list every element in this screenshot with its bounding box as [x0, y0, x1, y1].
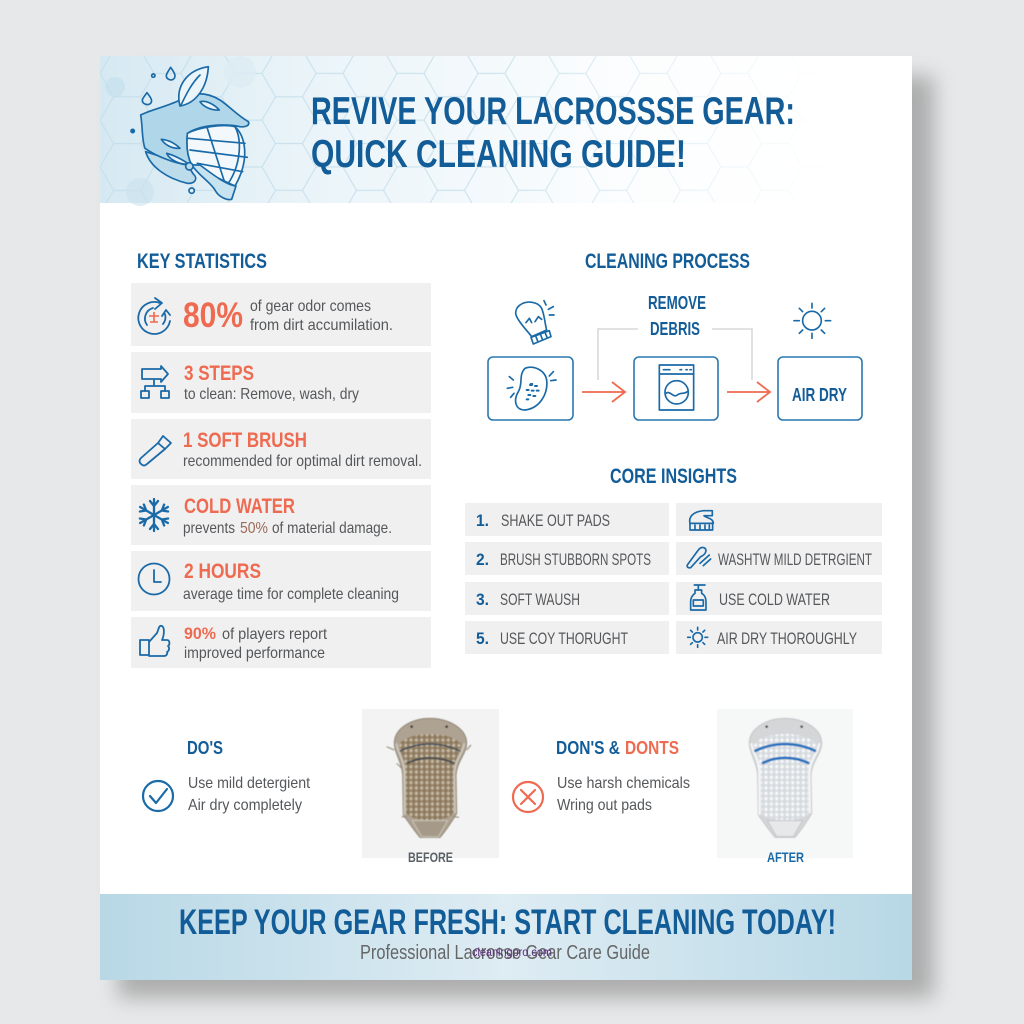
card shadow: [118, 76, 934, 998]
panel: core insights: [465, 465, 882, 654]
photo: clean lacrosse head, after: [717, 709, 853, 865]
heading: key statistics: KEY STATISTICS: [137, 250, 267, 273]
stat: cold water: 50%: [240, 520, 268, 537]
stat: cold water: prevents: [183, 520, 235, 537]
stat: 1 soft brush: recommended for optimal dirt removal.: [183, 453, 422, 470]
insight 1: SHAKE OUT PADS: [501, 511, 610, 530]
page card: [100, 56, 912, 980]
stat: 2 hours: average time for complete cleaning: [183, 586, 399, 603]
heading: cleaning process: CLEANING PROCESS: [585, 250, 750, 273]
do's list: Use mild detergient: [188, 775, 310, 792]
photo: dirty lacrosse head, before: [362, 709, 499, 865]
heading: do's: DO'S: [187, 738, 223, 758]
stat: 90% players: 90%: [184, 625, 216, 643]
icon: thumbs up: [140, 626, 169, 656]
insight: wash with mild detergent: [676, 542, 882, 575]
header banner: [100, 56, 912, 206]
stat: 3 steps: to clean: Remove, wash, dry: [184, 386, 359, 403]
stat: 80% gear odor: 80%: [183, 296, 243, 335]
insight: use cold water: USE COLD WATER: [719, 590, 830, 609]
title: REVIVE YOUR LACROSSSE GEAR:: [311, 90, 795, 133]
stat: 80% gear odor: from dirt accumilation.: [250, 317, 393, 334]
stat: cold water: [131, 485, 431, 545]
stat: cold water: of material damage.: [272, 520, 392, 537]
step box: air dry: [778, 357, 862, 420]
insight 2: BRUSH STUBBORN SPOTS: [500, 550, 651, 569]
insight 1: [465, 503, 669, 536]
stat: 2 hours: 2 HOURS: [184, 560, 261, 583]
icon: snowflake: [138, 499, 170, 531]
title: [311, 90, 795, 176]
insight 3: [465, 582, 669, 615]
icon: cleaning mitt: [516, 301, 554, 344]
insight: wash with mild detergent: WASHTW MILD DETRGIENT: [718, 550, 872, 569]
insight 2: 2.: [476, 550, 489, 569]
stat: 90% players: [131, 617, 431, 668]
label: remove debris: REMOVE: [648, 293, 706, 313]
step box: air dry: AIR DRY: [792, 385, 847, 405]
don'ts list: Wring out pads: [557, 797, 652, 814]
insight 5: USE COY THORUGHT: [500, 629, 628, 648]
stat: 3 steps: [131, 352, 431, 413]
heading: don's & donts: [556, 738, 679, 758]
stat: 1 soft brush: 1 SOFT BRUSH: [183, 429, 307, 452]
label: remove debris: [648, 293, 706, 339]
stat: 1 soft brush: [131, 419, 431, 479]
photo: dirty lacrosse head, before: BEFORE: [408, 849, 453, 865]
insight 2: [465, 542, 669, 575]
insight 1: 1.: [476, 511, 489, 530]
do's list: [188, 775, 310, 814]
footer subtitle: Professional Lacrosse Gear Care Guide: [360, 942, 650, 964]
do's list: Air dry completely: [188, 797, 302, 814]
panel: key statistics: [131, 250, 431, 668]
insight 3: SOFT WAUSH: [500, 590, 580, 609]
icon: check mark: [143, 781, 173, 811]
step box: washing machine: [634, 357, 718, 420]
heading: don's & donts: DONTS: [625, 738, 679, 758]
stat: cold water: COLD WATER: [184, 495, 295, 518]
don'ts list: Use harsh chemicals: [557, 775, 690, 792]
icon: cross mark: [513, 782, 543, 812]
footer banner: [100, 894, 912, 980]
icon: brush: [140, 436, 171, 466]
label: remove debris: DEBRIS: [650, 319, 700, 339]
insight: air dry thoroughly: AIR DRY THOROUGHLY: [717, 629, 857, 648]
stat: 90% players: improved performance: [184, 645, 325, 662]
panel: do's: [143, 738, 310, 814]
step box: dirty pad: [488, 357, 573, 420]
stat: 90% players: of players report: [222, 626, 328, 643]
icon: lacrosse helmet with leaf: [131, 67, 249, 200]
stat: 2 hours: [131, 551, 431, 611]
stat: 3 steps: 3 STEPS: [184, 362, 254, 385]
heading: core insights: CORE INSIGHTS: [610, 465, 737, 488]
stat: 80% gear odor: of gear odor comes: [250, 298, 371, 315]
footer url overlay: cleaningpro.com: [472, 945, 552, 959]
don'ts list: [557, 775, 690, 814]
insight 5: 5.: [476, 629, 489, 648]
insight: brush icon row: [676, 503, 882, 536]
icon: refresh cycle: [138, 298, 170, 334]
panel: don'ts: [513, 738, 690, 814]
photo: clean lacrosse head, after: AFTER: [767, 849, 804, 865]
insight 3: 3.: [476, 590, 489, 609]
panel: cleaning process: [488, 250, 862, 420]
arrow: step 1 to step 2: [582, 382, 625, 402]
icon: sun: [794, 303, 831, 338]
insight: use cold water: [676, 582, 882, 615]
insight 5: [465, 621, 669, 654]
arrow: step 2 to step 3: [727, 382, 770, 402]
stat: 80% gear odor: [131, 283, 431, 346]
title: QUICK CLEANING GUIDE!: [311, 133, 686, 176]
insight: air dry thoroughly: [676, 621, 882, 654]
heading: don's & donts: DON'S &: [556, 738, 620, 758]
icon: flow chart: [141, 366, 169, 398]
icon: clock: [138, 564, 170, 594]
